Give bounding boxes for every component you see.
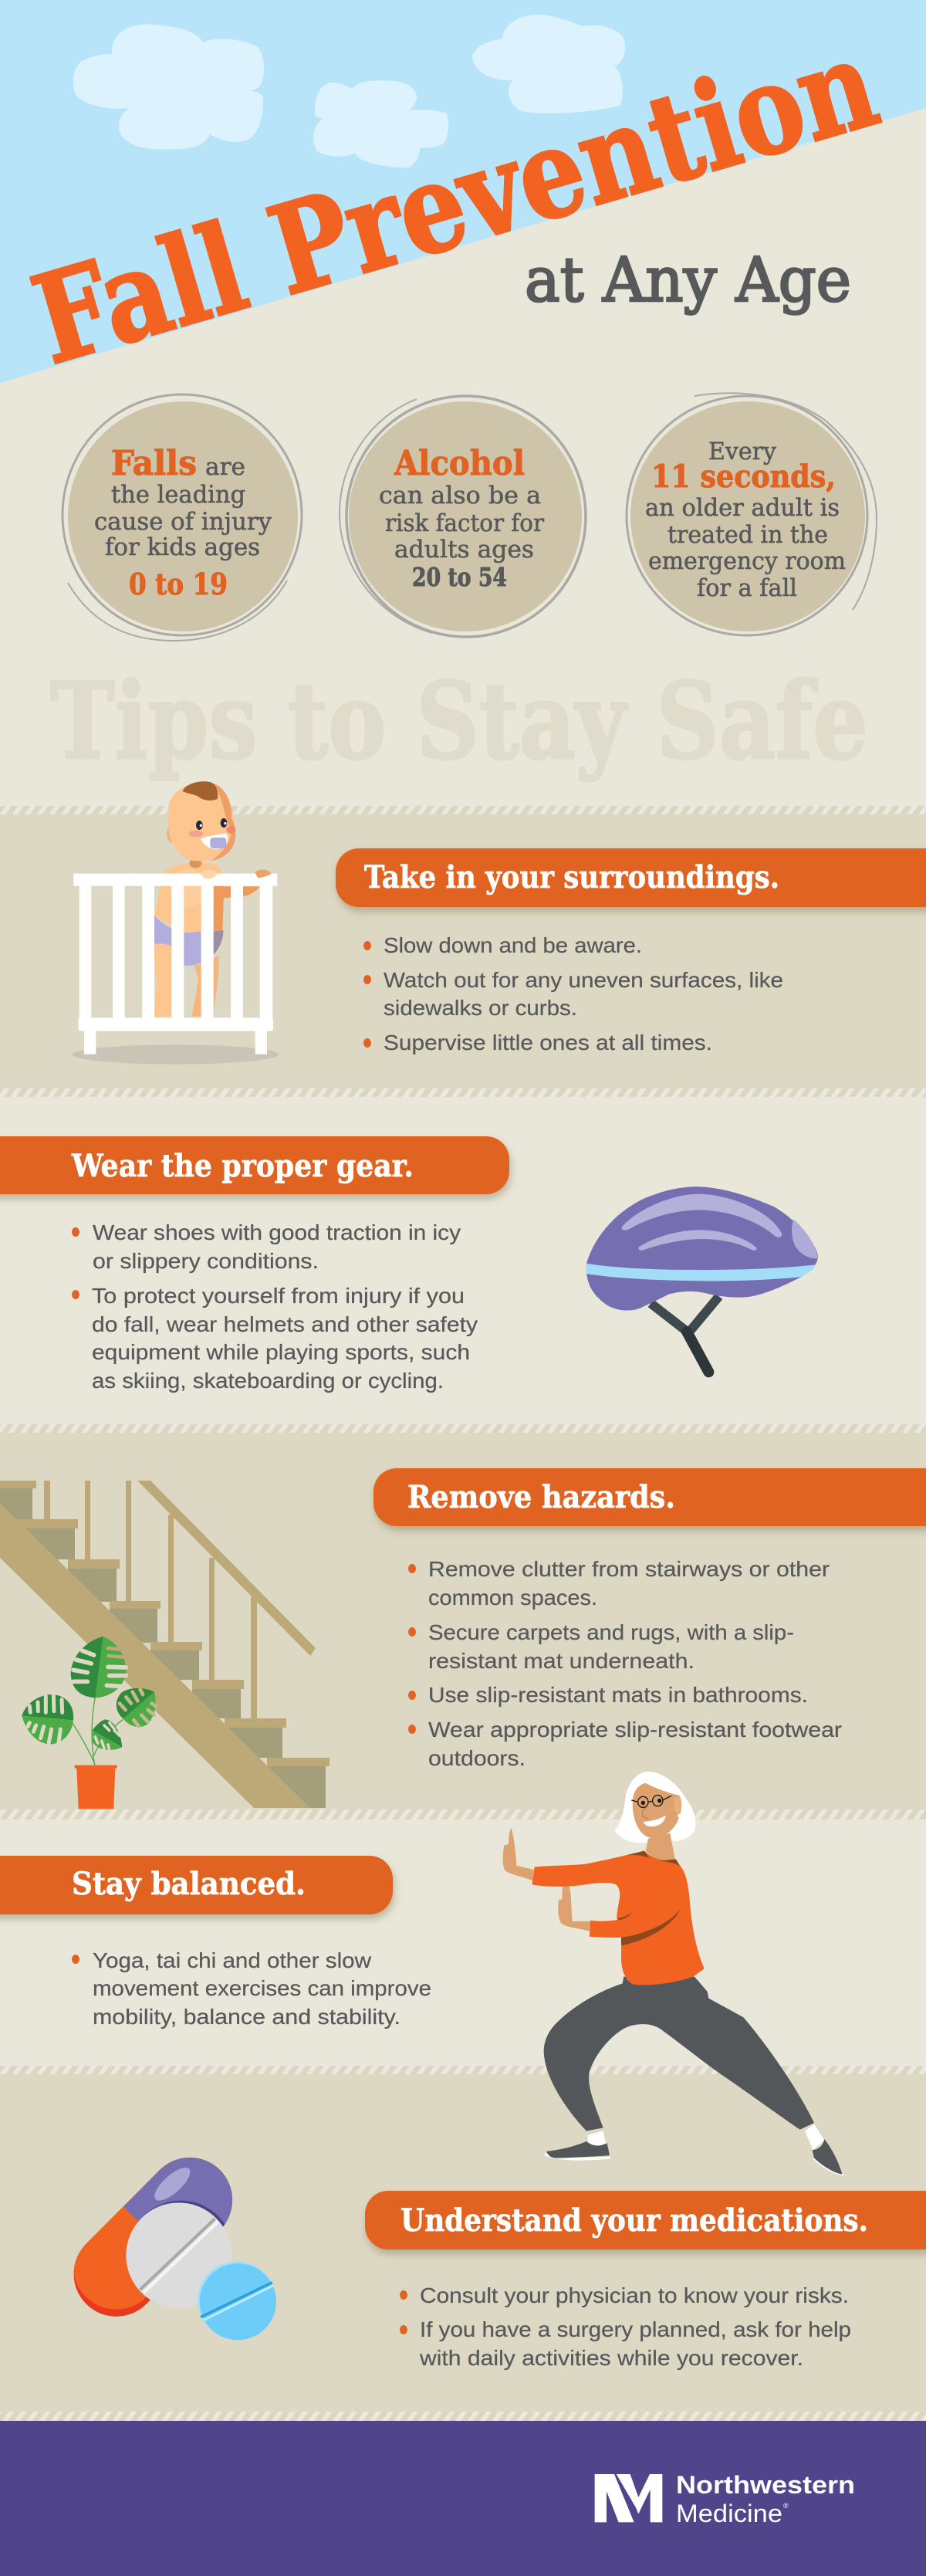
list: gear tips: equipment while playing sports, such: [92, 1340, 470, 1364]
stat circle: alcohol: Alcohol: [394, 444, 525, 483]
list: surroundings tips: Supervise little ones at all times.: [384, 1031, 712, 1054]
list: surroundings tips: [363, 933, 783, 1054]
stat circle: falls: Falls: [111, 444, 197, 483]
list: medication tips: [400, 2283, 851, 2370]
logo: Northwestern Medicine: [595, 2471, 855, 2527]
list: hazards tips: Remove clutter from stairways or other: [428, 1557, 830, 1581]
list: gear tips: do fall, wear helmets and other safety: [92, 1312, 478, 1336]
banner: Stay balanced: [0, 1856, 393, 1914]
logo: Northwestern Medicine: Medicine: [676, 2500, 782, 2527]
banner: Wear the proper gear: Wear the proper gear.: [71, 1148, 414, 1184]
list: balance tips: [72, 1948, 431, 2029]
banner: Remove hazards: Remove hazards.: [407, 1479, 675, 1515]
list: medication tips: Consult your physician to know your risks.: [420, 2283, 849, 2307]
list: hazards tips: Wear appropriate slip-resistant footwear: [428, 1718, 842, 1742]
banner: Take in your surroundings: [336, 848, 926, 907]
icon: helmet: [586, 1186, 818, 1372]
illustration: baby in crib: [72, 781, 279, 1065]
banner: Take in your surroundings: Take in your surroundings.: [364, 859, 779, 895]
stat circle: alcohol: 20 to 54: [412, 562, 507, 592]
footer band: [0, 2421, 926, 2576]
list: hazards tips: resistant mat underneath.: [428, 1649, 694, 1673]
stat circle: alcohol: can also be a: [379, 482, 541, 509]
list: gear tips: To protect yourself from injury if you: [92, 1284, 465, 1308]
stat circle: falls: for kids ages: [105, 533, 260, 561]
illustration: senior woman doing tai chi: [503, 1772, 843, 2175]
illustration: stairs: [0, 1481, 330, 1808]
list: balance tips: Yoga, tai chi and other slow: [93, 1948, 372, 1972]
band: medications: [0, 2074, 926, 2412]
stat circle: falls: [63, 394, 302, 641]
stat circle: falls: are: [205, 453, 245, 481]
list: hazards tips: Secure carpets and rugs, with a slip-: [428, 1620, 794, 1644]
list: gear tips: Wear shoes with good traction in icy: [93, 1220, 461, 1244]
stat circle: every 11 seconds: treated in the: [667, 521, 828, 549]
stat circle: every 11 seconds: an older adult is: [645, 494, 840, 522]
banner: Remove hazards: [373, 1468, 926, 1526]
list: surroundings tips: Slow down and be aware.: [384, 933, 642, 957]
stat circle: alcohol: risk factor for: [385, 509, 544, 537]
list: hazards tips: [408, 1557, 842, 1770]
stat circle: falls: 0 to 19: [129, 567, 228, 601]
logo: Northwestern Medicine: Northwestern: [676, 2471, 855, 2499]
list: gear tips: [72, 1220, 478, 1393]
sky: [0, 0, 926, 383]
list: hazards tips: common spaces.: [428, 1586, 597, 1610]
stat circle: falls: the leading: [111, 481, 245, 509]
list: hazards tips: Use slip-resistant mats in bathrooms.: [428, 1683, 808, 1707]
banner: Understand your medications: [365, 2191, 926, 2249]
stat circle: every 11 seconds: 11 seconds,: [651, 459, 836, 495]
stat circle: every 11 seconds: for a fall: [697, 574, 797, 602]
hatched dividers: [0, 806, 926, 2421]
stat circle: alcohol: adults ages: [394, 536, 534, 564]
icon: pills: [74, 2157, 276, 2341]
list: balance tips: mobility, balance and stability.: [93, 2005, 400, 2029]
stat circle: falls: cause of injury: [94, 508, 272, 536]
list: surroundings tips: Watch out for any uneven surfaces, like: [384, 968, 783, 992]
list: gear tips: as skiing, skateboarding or cycling.: [92, 1369, 444, 1393]
list: medication tips: with daily activities while you recover.: [419, 2346, 803, 2370]
banner: Stay balanced: Stay balanced.: [72, 1866, 306, 1902]
stat circle: every 11 seconds: [627, 393, 877, 635]
illustration: potted plant: [22, 1637, 156, 1809]
clouds: [73, 15, 625, 168]
banner: Understand your medications: Understand your medications.: [400, 2202, 868, 2239]
logo: Northwestern Medicine: ®: [783, 2502, 789, 2510]
list: hazards tips: outdoors.: [428, 1746, 526, 1770]
subtitle: at Any Age: at Any Age: [525, 244, 851, 316]
stat circle: every 11 seconds: emergency room: [648, 547, 846, 575]
band: hazards: [0, 1433, 926, 1809]
banner: Wear the proper gear: [0, 1136, 509, 1194]
stat circle: alcohol: [340, 396, 586, 637]
list: surroundings tips: sidewalks or curbs.: [384, 996, 577, 1020]
list: balance tips: movement exercises can improve: [93, 1976, 431, 2000]
stat circle: every 11 seconds: Every: [708, 438, 776, 465]
list: gear tips: or slippery conditions.: [93, 1249, 319, 1273]
list: medication tips: If you have a surgery planned, ask for help: [420, 2317, 851, 2341]
band: surroundings: [0, 814, 926, 1088]
